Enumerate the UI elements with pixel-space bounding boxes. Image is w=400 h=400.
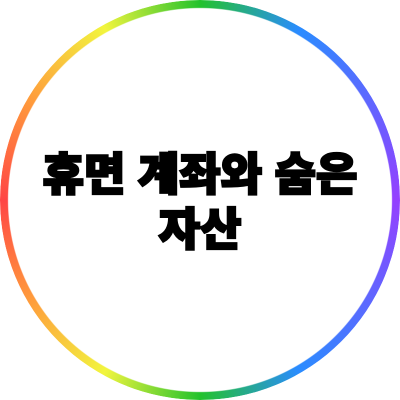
title: 휴면 계좌와 숨은 <box>43 149 357 200</box>
title: 자산 <box>159 204 241 255</box>
title <box>43 149 357 255</box>
